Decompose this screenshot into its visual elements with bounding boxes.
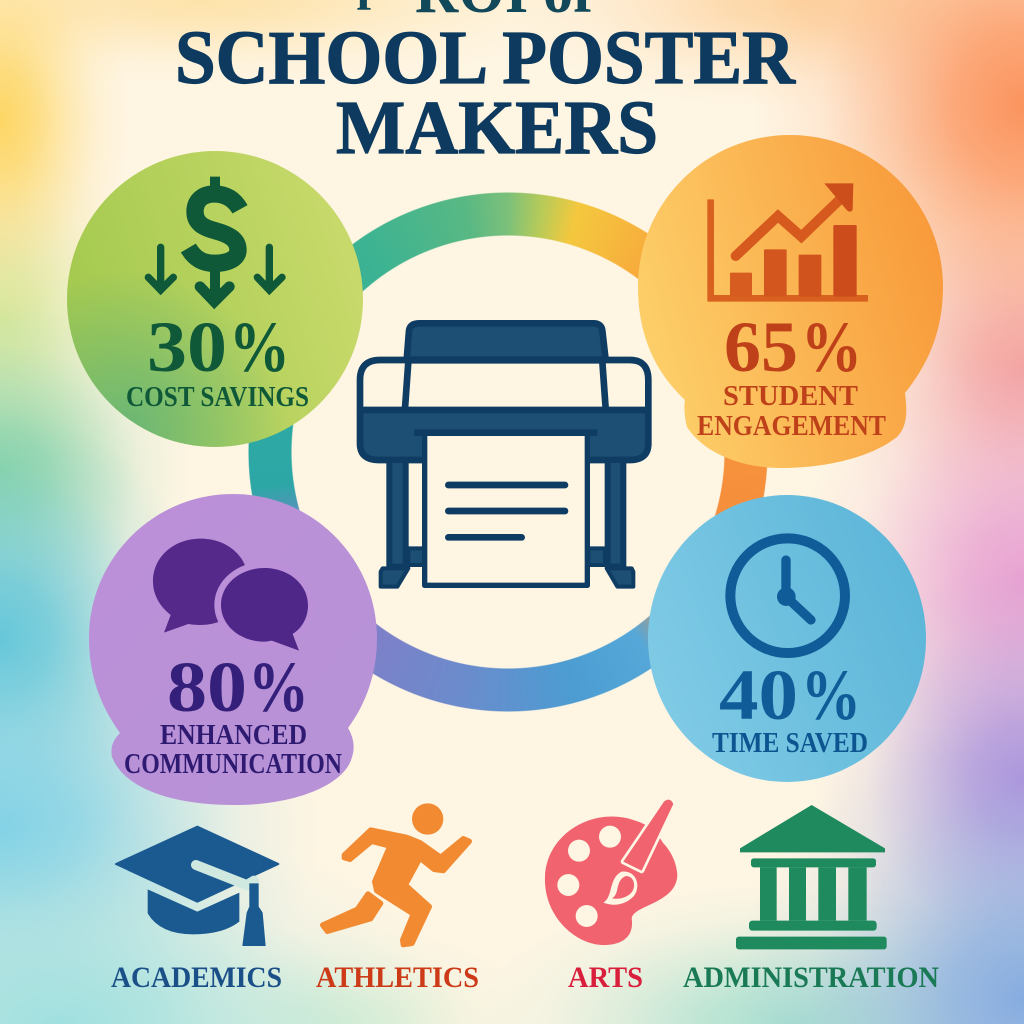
title bbox=[175, 0, 796, 170]
stat: 30%: % bbox=[229, 307, 290, 387]
panel: time saved bbox=[648, 495, 926, 782]
stat: 40%: % bbox=[801, 655, 861, 735]
label: arts: ARTS bbox=[568, 961, 643, 994]
ring: gradient loop connecting the four stats bbox=[248, 192, 768, 712]
stat: 80%: 80 bbox=[167, 647, 247, 727]
label: administration: ADMINISTRATION bbox=[683, 961, 939, 994]
icon: runner bbox=[323, 803, 469, 945]
stat: 65%: 65 bbox=[724, 307, 798, 387]
stat: 40%: 40 bbox=[719, 655, 798, 735]
stat: 65%: % bbox=[801, 307, 862, 387]
stat: 30%: 30 bbox=[147, 307, 227, 387]
icon: rising bar chart bbox=[711, 183, 868, 298]
stat: 40% bbox=[719, 655, 861, 735]
label: cost savings: COST SAVINGS bbox=[126, 381, 309, 413]
icon: institution building bbox=[736, 805, 887, 949]
title: SCHOOL POSTER bbox=[175, 16, 796, 100]
stat: 65% bbox=[724, 307, 862, 387]
label: time saved: TIME SAVED bbox=[712, 728, 868, 759]
icon: clock bbox=[730, 538, 845, 653]
panel: cost savings bbox=[67, 151, 363, 447]
icon: large format printer bbox=[360, 323, 648, 587]
title: MAKERS bbox=[336, 86, 658, 170]
category: athletics bbox=[316, 803, 479, 994]
label: student engagement bbox=[697, 381, 886, 442]
category: administration bbox=[683, 805, 939, 994]
label: academics: ACADEMICS bbox=[111, 961, 282, 994]
icon: palette and brush bbox=[545, 800, 677, 945]
label: athletics: ATHLETICS bbox=[316, 961, 479, 994]
stat: 80% bbox=[167, 647, 309, 727]
panel: enhanced communication bbox=[89, 494, 377, 805]
icon: graduation cap bbox=[116, 827, 278, 946]
stat: 30% bbox=[147, 307, 290, 387]
category: arts bbox=[545, 800, 677, 994]
label: student engagement: STUDENT bbox=[723, 381, 858, 412]
icon: dollar sign with down arrows bbox=[148, 177, 282, 302]
stat: 80%: % bbox=[248, 647, 309, 727]
category: academics bbox=[111, 827, 282, 994]
label: student engagement: ENGAGEMENT bbox=[697, 411, 886, 442]
label: enhanced communication bbox=[124, 720, 342, 780]
label: enhanced communication: COMMUNICATION bbox=[124, 749, 342, 780]
panel: student engagement bbox=[638, 135, 943, 468]
icon: speech bubbles bbox=[153, 539, 314, 651]
label: enhanced communication: ENHANCED bbox=[160, 720, 307, 751]
